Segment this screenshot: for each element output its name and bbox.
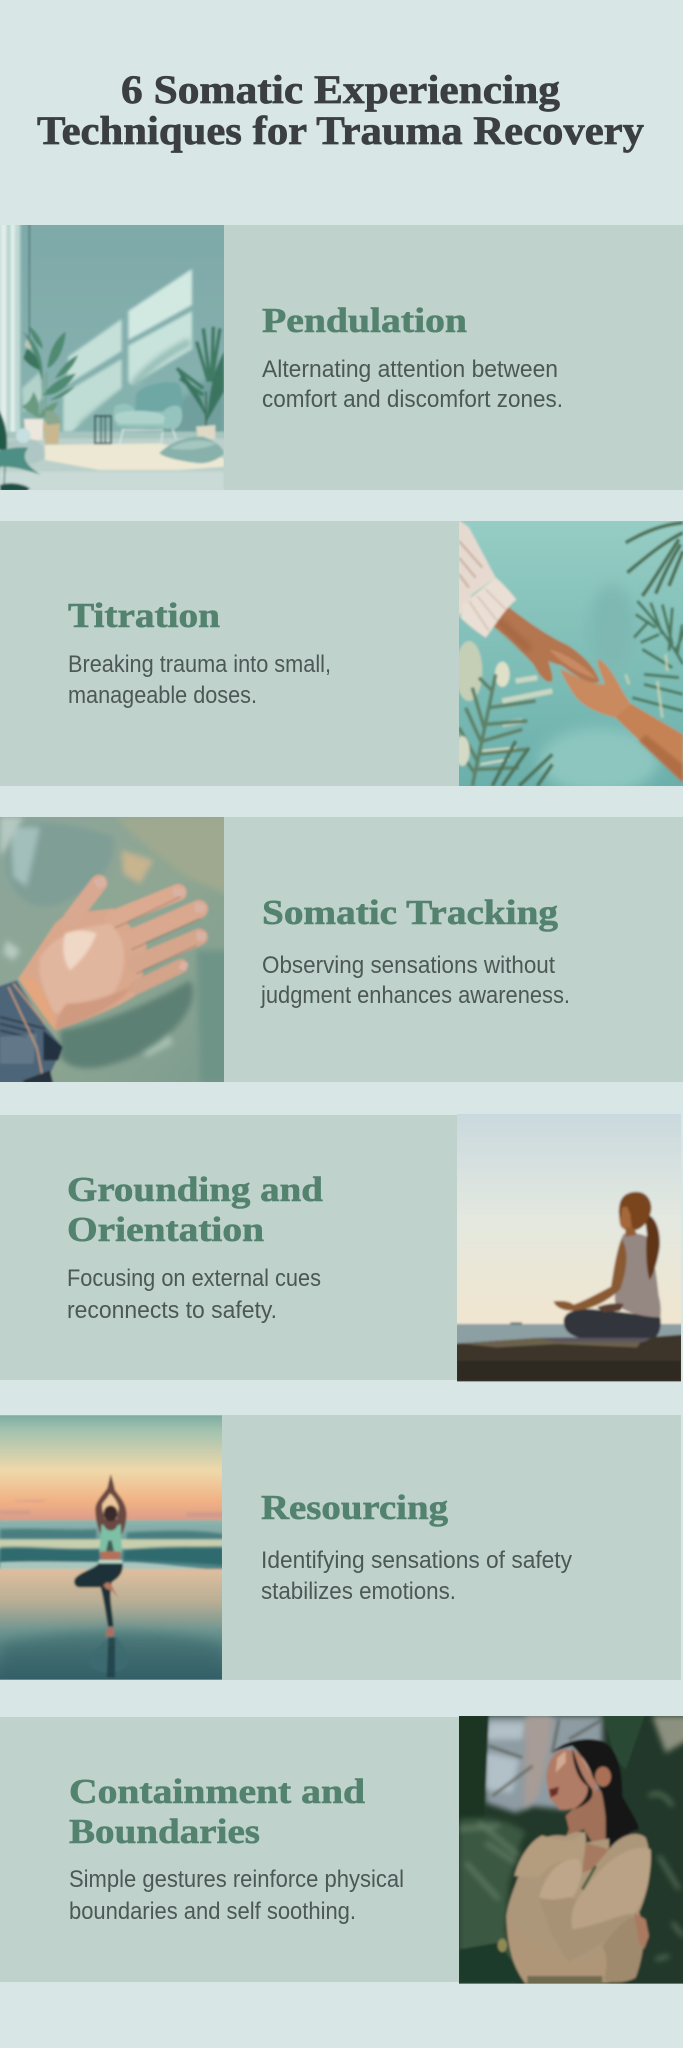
text: grounding description xyxy=(67,1265,321,1324)
heading: containment and boundaries xyxy=(69,1772,366,1851)
panel: somatic tracking xyxy=(0,810,683,1090)
text: containment description xyxy=(69,1866,404,1925)
image: woman hugging herself among foliage xyxy=(452,1709,683,1989)
heading: grounding and orientation xyxy=(67,1170,324,1249)
heading: resourcing: Resourcing xyxy=(261,1488,449,1527)
text: grounding description: Focusing on external cues xyxy=(67,1265,321,1292)
heading: containment and boundaries: Boundaries xyxy=(69,1812,260,1851)
panel: resourcing xyxy=(0,1407,681,1686)
text: containment description: boundaries and self soothing. xyxy=(69,1898,356,1925)
text: grounding description: reconnects to safety. xyxy=(67,1297,277,1324)
text: pendulation description: Alternating attention between xyxy=(262,356,558,383)
text: resourcing description xyxy=(261,1547,572,1605)
image: painted hand resting on a wall xyxy=(0,810,233,1090)
heading: pendulation: Pendulation xyxy=(262,301,467,340)
text: somatic tracking description: Observing sensations without xyxy=(262,952,555,979)
image: woman meditating by the sea xyxy=(450,1107,683,1387)
image: sunlit room with plants and armchair xyxy=(0,218,233,498)
text: titration description: manageable doses. xyxy=(68,682,257,709)
text: resourcing description: stabilizes emotions. xyxy=(261,1578,456,1605)
text: somatic tracking description xyxy=(260,952,570,1009)
title: Techniques for Trauma Recovery xyxy=(37,108,644,153)
text: titration description: Breaking trauma into small, xyxy=(68,651,331,678)
heading: containment and boundaries: Containment and xyxy=(69,1772,366,1811)
text: pendulation description xyxy=(262,356,563,413)
text: somatic tracking description: judgment enhances awareness. xyxy=(260,982,570,1009)
title xyxy=(37,67,644,153)
heading: somatic tracking: Somatic Tracking xyxy=(262,893,559,932)
heading: grounding and orientation: Orientation xyxy=(67,1210,264,1249)
image: tree-pose yoga on a beach at sunset xyxy=(0,1407,233,1686)
text: resourcing description: Identifying sensations of safety xyxy=(261,1547,572,1574)
panel: titration xyxy=(0,514,683,794)
heading: grounding and orientation: Grounding and xyxy=(67,1170,324,1209)
text: pendulation description: comfort and discomfort zones. xyxy=(262,386,563,413)
panel: containment and boundaries xyxy=(0,1709,683,1989)
title: 6 Somatic Experiencing xyxy=(121,67,560,112)
text: titration description xyxy=(68,651,331,709)
image: two hands reaching with fronds xyxy=(452,514,683,794)
heading: titration: Titration xyxy=(68,596,220,635)
text: containment description: Simple gestures reinforce physical xyxy=(69,1866,404,1893)
panel: grounding and orientation xyxy=(0,1107,683,1387)
panel: pendulation xyxy=(0,218,683,498)
